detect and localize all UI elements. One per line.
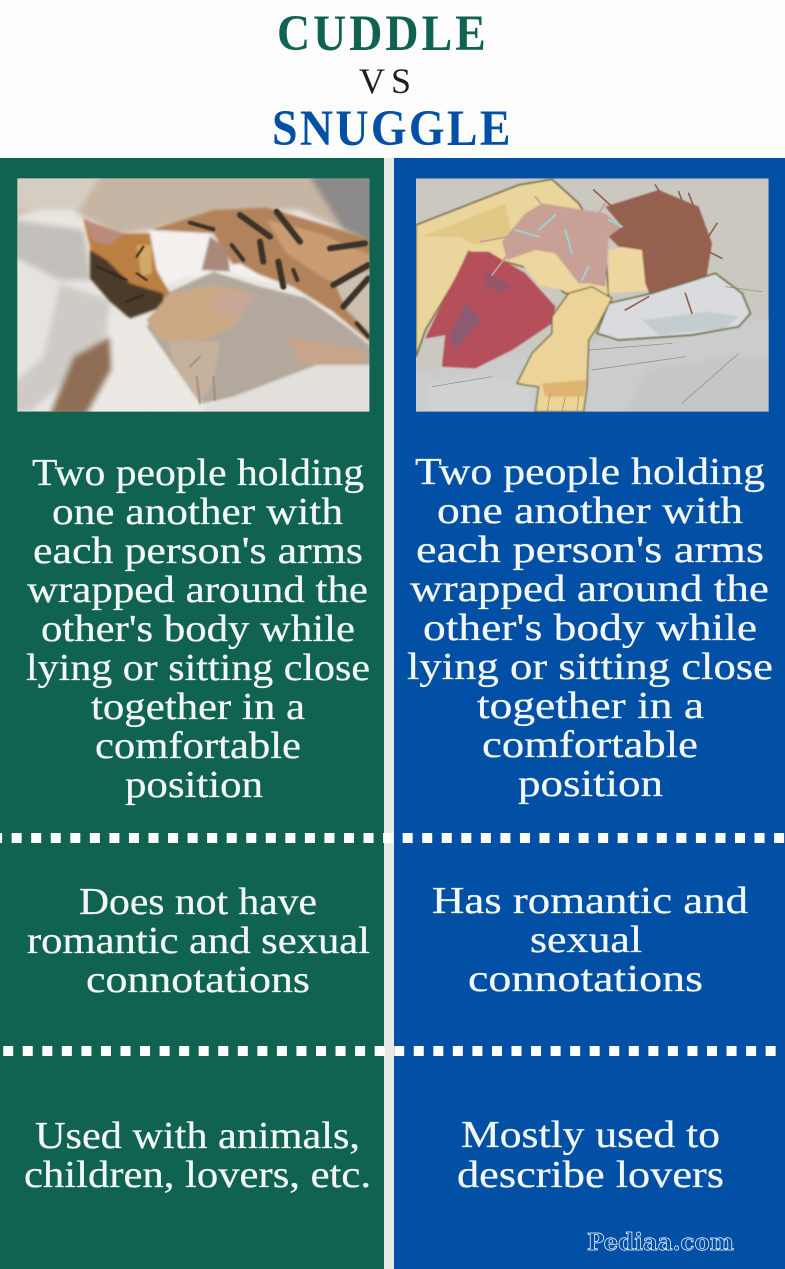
body text: definition: lying or sitting close [407,646,773,688]
body text: definition: one another with [437,490,743,532]
panel: cuddle [0,158,384,1269]
source credit: Pediaa.com [587,1229,734,1256]
body text: usage: Mostly used to [461,1114,720,1156]
body text: definition: lying or sitting close [26,647,370,689]
body text: definition: Two people holding [415,451,765,493]
body text: definition: position [518,763,663,805]
panel: snuggle [394,158,785,1269]
body text: connotations: connotations [468,958,703,1000]
body text: usage: children, lovers, etc. [24,1154,371,1196]
body text: definition: each person's arms [416,529,764,571]
body text: definition: position [125,764,263,806]
body text: connotations: romantic and sexual [27,920,370,962]
body text: definition [407,451,773,805]
body text: connotations: Has romantic and [432,880,748,922]
body text: usage [457,1114,724,1196]
body text: connotations: sexual [530,919,642,961]
body text: definition: together in a [477,685,704,727]
image: illustrated couple snuggling [412,178,772,415]
body text: definition: one another with [52,491,343,533]
body text: definition: comfortable [482,724,698,766]
heading: vs: VS [359,61,411,101]
body text: definition: wrapped around the [410,568,769,610]
body text: definition: other's body while [423,607,757,649]
heading: cuddle: CUDDLE [277,6,486,62]
body text: connotations: Does not have [79,881,317,923]
body text: usage: Used with animals, [35,1115,360,1157]
body text: connotations: connotations [86,959,310,1001]
heading: snuggle: SNUGGLE [272,101,511,157]
body text: connotations [432,880,748,1000]
title [272,6,510,157]
body text: definition: wrapped around the [27,569,368,611]
body text: connotations [27,881,370,1001]
body text: definition [26,452,370,806]
body text: definition: Two people holding [32,452,364,494]
body text: definition: other's body while [41,608,355,650]
body text: definition: comfortable [95,725,301,767]
image: two cats cuddling [13,175,373,415]
body text: definition: each person's arms [33,530,363,572]
body text: definition: together in a [91,686,305,728]
body text: usage: describe lovers [457,1154,724,1196]
body text: usage [24,1115,371,1196]
